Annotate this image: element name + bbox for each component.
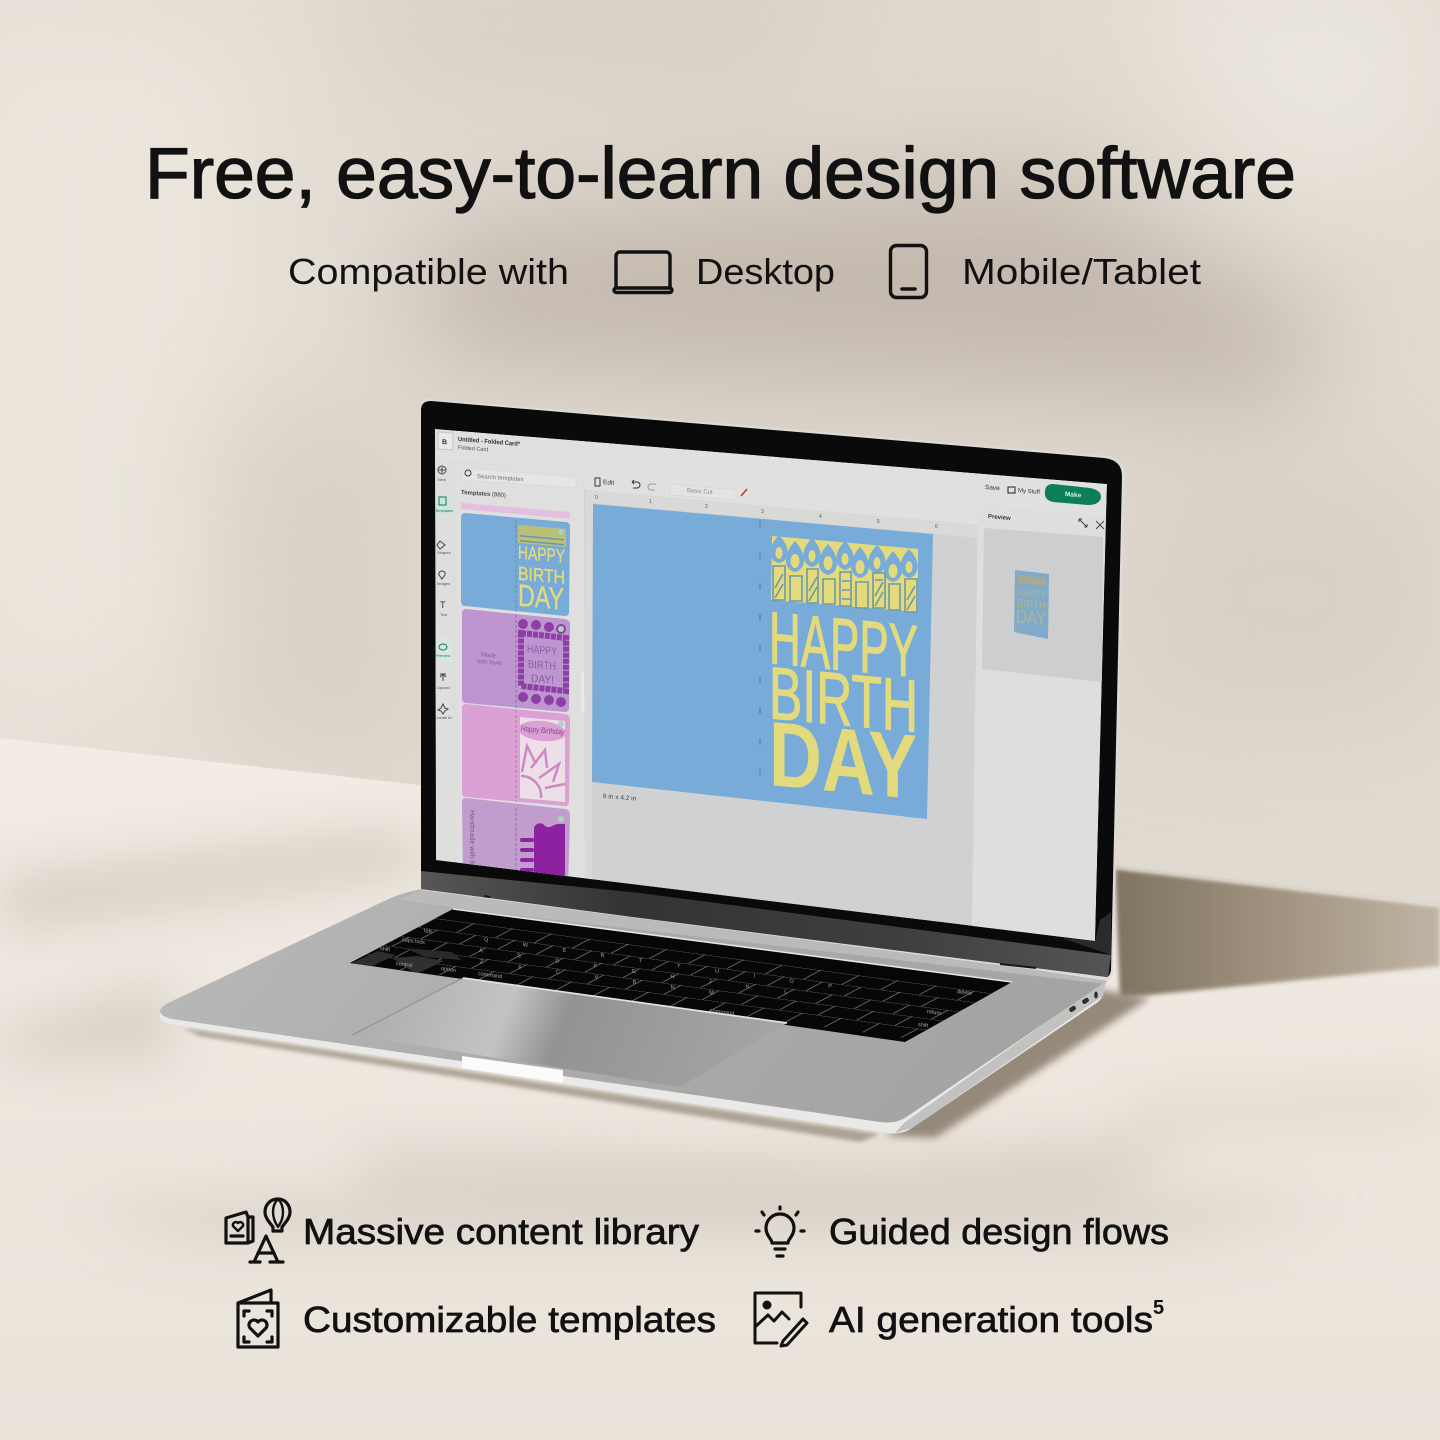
feature list — [226, 1199, 1169, 1347]
icon: image and pencil — [755, 1293, 807, 1346]
toolbar — [594, 478, 748, 500]
ruler — [593, 491, 978, 538]
icon: mobile — [890, 246, 926, 298]
canvas: 4 — [819, 514, 822, 520]
template card: pink sunflower: Happy Birthday — [521, 724, 565, 737]
text: mobile/tablet: Mobile/Tablet — [962, 251, 1201, 292]
feature: guided design flows — [756, 1207, 1169, 1256]
make button — [1045, 484, 1101, 505]
canvas: 5 — [877, 519, 880, 525]
card artwork — [592, 504, 933, 819]
canvas: 2 — [705, 504, 708, 510]
compatibility row — [288, 246, 1201, 298]
laptop base — [160, 888, 1112, 1133]
key legends: shift — [380, 946, 391, 953]
save and stuff: Save — [985, 484, 1000, 492]
template card: purple cake: Handmade with love — [468, 810, 475, 874]
logo notch — [462, 1056, 563, 1083]
template card: pink sunflower — [462, 704, 570, 806]
icon: light bulb — [756, 1207, 804, 1256]
template card: purple flowers: BIRTH — [528, 659, 556, 673]
key legends: return — [927, 1009, 941, 1017]
app top bar — [435, 429, 1107, 505]
template card: purple flowers: Made — [481, 652, 497, 660]
preview thumbnail: DAY — [1016, 606, 1046, 630]
key legends: option — [441, 966, 456, 974]
left tool rail — [435, 458, 454, 873]
app top bar: B — [442, 439, 447, 446]
screen — [435, 429, 1107, 941]
canvas: 0 — [595, 495, 598, 501]
left tool rail: Images — [437, 581, 450, 586]
templates panel: Search templates — [477, 474, 524, 483]
template card: purple flowers: HAPPY — [527, 643, 558, 658]
app top bar: Folded Card — [458, 445, 488, 453]
template card: purple cake — [462, 798, 570, 876]
search field — [462, 468, 576, 488]
text: compatible with: Compatible with — [288, 251, 569, 292]
card greeting — [772, 612, 918, 798]
template card: purple flowers — [462, 609, 570, 712]
key legends: QWERTYUIOP — [484, 937, 866, 995]
feature: ai generation tools — [755, 1293, 1164, 1346]
preview thumbnail — [1014, 570, 1049, 639]
left tool rail: Shapes — [437, 550, 451, 555]
key legends: tab — [424, 928, 432, 935]
template card: happy birthday blue: HAPPY — [518, 543, 565, 568]
keyboard — [350, 908, 1012, 1042]
templates panel — [455, 462, 587, 890]
card greeting: DAY — [769, 702, 917, 819]
text: desktop: Desktop — [696, 251, 835, 292]
key legends — [380, 928, 972, 1029]
template card: happy birthday blue: DAY — [518, 578, 564, 617]
laptop lid — [420, 399, 1125, 981]
trackpad — [352, 978, 787, 1087]
text: Massive content library — [303, 1211, 699, 1252]
title: Free, easy-to-learn design software — [145, 134, 1296, 214]
hinge marks — [484, 896, 1036, 968]
preview thumbnail: BIRTH — [1017, 598, 1046, 612]
preview panel: Preview — [988, 514, 1011, 522]
lid chin — [421, 871, 1111, 977]
icon: laptop — [614, 252, 672, 292]
app logo — [438, 432, 453, 450]
make button: Make — [1065, 491, 1082, 499]
key legends: command — [478, 971, 502, 980]
text: AI generation tools — [829, 1299, 1153, 1340]
template card: purple flowers: with love! — [476, 659, 502, 667]
canvas: 3 — [761, 509, 764, 515]
candle band — [770, 535, 918, 612]
feature: customizable templates — [238, 1290, 716, 1347]
canvas: 6 — [935, 524, 938, 530]
left tool rail: Create AI — [435, 715, 452, 720]
left tool rail: Upload — [437, 685, 450, 690]
card greeting: HAPPY — [769, 596, 918, 693]
left tool rail: Preview — [436, 653, 450, 658]
icon: template card — [238, 1290, 278, 1347]
feature: massive content library — [226, 1199, 699, 1262]
key legends: delete — [957, 989, 972, 997]
icon: library — [226, 1199, 290, 1262]
left tool rail: New — [438, 477, 446, 482]
preview thumbnail: HAPPY — [1017, 587, 1046, 601]
panel collapse tab — [581, 672, 584, 712]
app top bar: My Stuff — [1018, 488, 1040, 496]
key legends: ZXCVBNM — [480, 959, 748, 1001]
ports — [1068, 992, 1098, 1013]
left tool rail: Templates — [435, 508, 453, 513]
text: Guided design flows — [829, 1211, 1169, 1252]
canvas: 1 — [649, 499, 652, 505]
templates panel: Templates (880) — [461, 490, 506, 499]
left tool rail: T — [440, 600, 446, 610]
template card: happy birthday blue: BIRTH — [518, 564, 565, 589]
canvas — [584, 490, 980, 925]
preview panel — [972, 504, 1105, 941]
shadow cast to the right of laptop — [1115, 869, 1440, 998]
footnote marker: 5 — [1153, 1297, 1164, 1319]
key legends: control — [396, 961, 412, 969]
key legends: caps lock — [402, 937, 425, 946]
template card: purple flowers: DAY! — [531, 673, 554, 687]
key legends: ASDFGHJKL — [479, 948, 822, 1000]
card greeting: BIRTH — [769, 651, 918, 748]
left tool rail: Text — [440, 612, 448, 617]
file title: Untitled - Folded Card* — [458, 436, 520, 448]
key legends: shift — [918, 1022, 929, 1029]
template card: happy birthday blue — [461, 513, 570, 617]
toolbar: Edit — [603, 479, 614, 487]
key legends: command — [710, 1008, 734, 1017]
size label: 6 in x 4.2 in — [603, 793, 637, 803]
text: Customizable templates — [303, 1299, 716, 1340]
laptop — [160, 399, 1125, 1133]
toolbar: Basic Cut — [687, 488, 713, 496]
